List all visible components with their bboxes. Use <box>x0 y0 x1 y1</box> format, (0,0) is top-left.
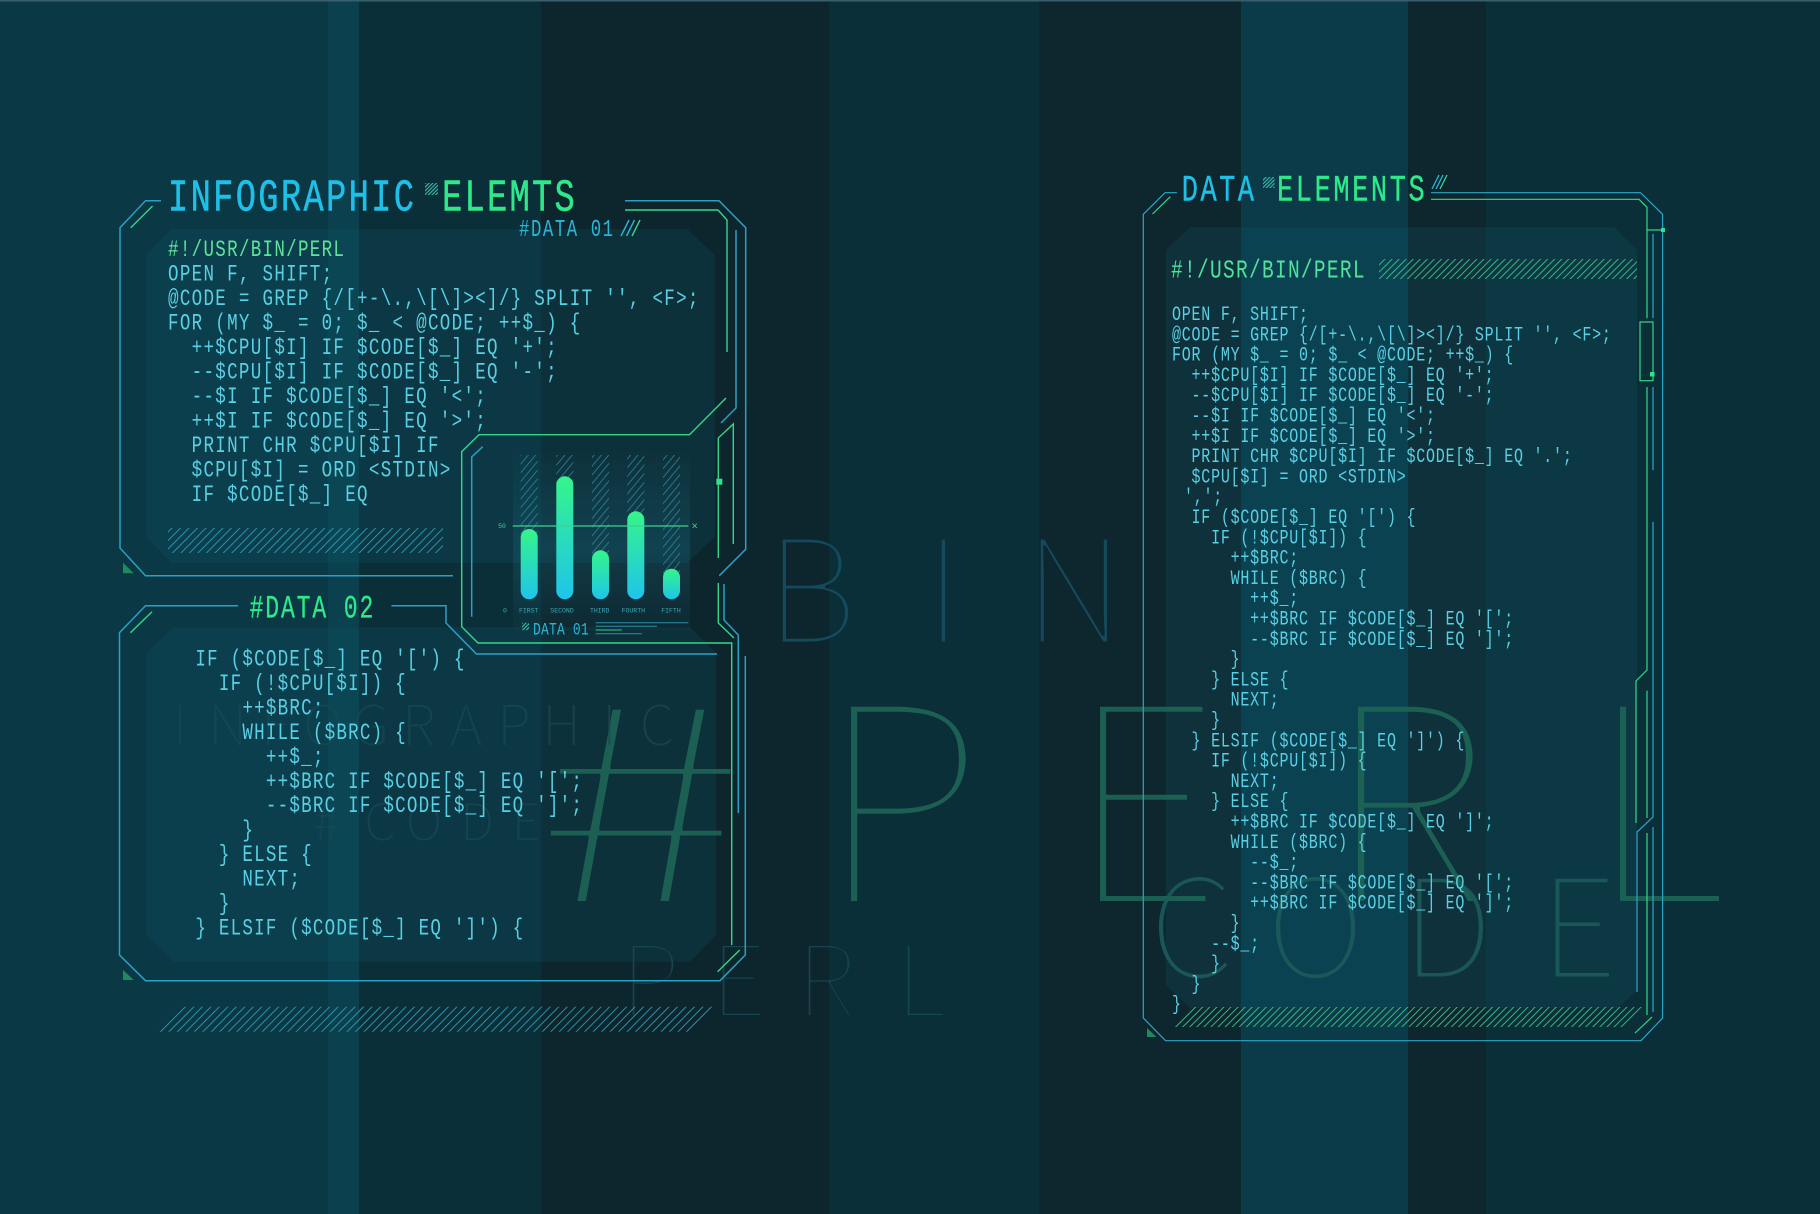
code block: data 02 panel: --$BRC IF $CODE[$_] EQ ']'; <box>195 794 583 820</box>
code block: data elements panel: } <box>1172 994 1182 1017</box>
chart caption: DATA 01: DATA 01 <box>533 620 589 640</box>
code block: infographic panel <box>168 238 700 509</box>
code block: data elements panel: ++$BRC; <box>1172 548 1299 570</box>
bars <box>521 476 680 599</box>
code block: data 02 panel: } <box>195 819 254 845</box>
code block: infographic panel: FOR (MY $_ = 0; $_ < @CODE; ++$_) { <box>168 311 582 337</box>
code block: data 02 panel: } ELSIF ($CODE[$_] EQ ']') { <box>195 916 524 942</box>
ghost word: INFOGRAPHIC: INFOGRAPHIC <box>173 681 674 761</box>
hatch strip: beside perl shebang <box>1379 259 1637 279</box>
code block: data elements panel: WHILE ($BRC) { <box>1172 568 1367 591</box>
panel: infographic elements frame <box>120 201 746 576</box>
code block: data elements panel <box>1172 304 1612 1017</box>
chart frame <box>462 398 733 945</box>
code block: data elements panel: ++$BRC IF $CODE[$_] EQ ']'; <box>1172 893 1514 915</box>
code block: data elements panel: IF (!$CPU[$I]) { <box>1172 527 1367 550</box>
code block: infographic panel: #!/USR/BIN/PERL <box>168 238 345 264</box>
code block: data elements panel: WHILE ($BRC) { <box>1172 832 1367 855</box>
hatch strip: infographic panel <box>168 528 443 553</box>
code block: infographic panel: PRINT CHR $CPU[$I] IF <box>168 434 440 460</box>
heading: #DATA 02: #DATA 02 <box>250 592 375 628</box>
code block: data elements panel: ++$BRC IF $CODE[$_] EQ ']'; <box>1172 812 1494 834</box>
code block: data elements panel: ++$_; <box>1172 588 1299 611</box>
code block: infographic panel: --$I IF $CODE[$_] EQ '<'; <box>168 385 487 411</box>
panel fill: data 02 panel <box>146 627 716 962</box>
x axis labels: FIFTH <box>661 608 681 614</box>
panel fill: data elements panel <box>1166 227 1637 1008</box>
code block: data elements panel: } ELSE { <box>1172 670 1289 692</box>
title: DATA ELEMENTS <box>1182 170 1447 212</box>
ghost symbol: hash: # <box>532 587 746 982</box>
code block: data elements panel: ++$I IF $CODE[$_] EQ '>'; <box>1172 426 1436 449</box>
code block: data elements panel: --$_; <box>1172 852 1299 875</box>
code block: data elements panel: } <box>1172 710 1221 733</box>
code block: data elements panel: NEXT; <box>1172 690 1279 712</box>
ghost word: BIN: BIN <box>766 478 1124 684</box>
x axis labels: THIRD <box>590 608 610 614</box>
x axis labels <box>503 608 681 614</box>
code block: data 02 panel: NEXT; <box>195 867 301 894</box>
code block: data 02 panel: ++$BRC; <box>195 696 325 722</box>
code block: data 02 panel: } <box>195 892 231 918</box>
x axis labels: FOURTH <box>622 608 645 614</box>
threshold line at 50: × <box>691 522 698 534</box>
code block: infographic panel: @CODE = GREP {/[+-\.,\[\]><]/} SPLIT '', <F>; <box>168 287 700 313</box>
title: DATA ELEMENTS: DATA <box>1182 170 1256 212</box>
code block: data elements panel: IF ($CODE[$_] EQ '[') { <box>1172 507 1416 530</box>
code block: infographic panel: ++$CPU[$I] IF $CODE[$_] EQ '+'; <box>168 336 558 362</box>
code block: data elements panel: } ELSE { <box>1172 791 1289 814</box>
code block: data 02 panel: ++$_; <box>195 745 325 771</box>
code block: data 02 panel: ++$BRC IF $CODE[$_] EQ '['; <box>195 770 583 796</box>
code block: data 02 panel: IF ($CODE[$_] EQ '[') { <box>195 647 466 673</box>
ghost word: CODE: CODE <box>1150 820 1616 1017</box>
code block: data elements panel: } <box>1172 954 1221 976</box>
panel: data elements frame <box>1143 193 1665 1041</box>
code block: data elements panel: ++$BRC IF $CODE[$_] EQ '['; <box>1172 609 1514 631</box>
threshold line at 50: 50 <box>498 523 506 530</box>
code block: data 02 panel: IF (!$CPU[$I]) { <box>195 672 407 698</box>
bar hatch backgrounds <box>521 455 680 575</box>
code block: data 02 panel: WHILE ($BRC) { <box>195 721 407 747</box>
chart glow <box>513 450 690 630</box>
code block: infographic panel: IF $CODE[$_] EQ <box>168 483 369 509</box>
x axis labels: 0 <box>503 608 507 614</box>
code block: data elements panel: ','; <box>1184 487 1223 509</box>
title: DATA ELEMENTS: ELEMENTS <box>1277 170 1427 212</box>
code block: infographic panel: $CPU[$I] = ORD <STDIN> <box>168 458 452 484</box>
code block: data elements panel: } <box>1172 649 1240 672</box>
code block: data elements panel: @CODE = GREP {/[+-\.,\[\]><]/} SPLIT '', <F>; <box>1172 324 1612 347</box>
chart panel <box>462 398 733 945</box>
code block: data elements panel: } ELSIF ($CODE[$_] EQ ']') { <box>1172 730 1465 753</box>
ghost word: PERL small: PERL <box>621 903 946 1045</box>
code block: data elements panel: --$I IF $CODE[$_] EQ '<'; <box>1172 406 1436 428</box>
code block: data elements panel: PRINT CHR $CPU[$I] IF $CODE[$_] EQ '.'; <box>1172 446 1573 469</box>
code block: infographic panel: ++$I IF $CODE[$_] EQ '>'; <box>168 409 487 435</box>
x axis labels: SECOND <box>550 608 574 614</box>
code block: data elements panel: } <box>1172 974 1201 997</box>
code block: data elements panel: --$BRC IF $CODE[$_] EQ ']'; <box>1172 629 1514 652</box>
threshold line at 50 <box>498 522 698 534</box>
ghost word: #CODE: #CODE <box>314 783 540 855</box>
ghost word: PERL large: PERL <box>819 586 1727 982</box>
code block: data elements panel: --$CPU[$I] IF $CODE[$_] EQ '-'; <box>1172 385 1494 408</box>
subtitle: #DATA 01: #DATA 01 <box>519 218 615 244</box>
chart caption: DATA 01 <box>522 620 688 640</box>
code block: data elements panel: } <box>1172 913 1240 936</box>
code block: infographic panel: --$CPU[$I] IF $CODE[$_] EQ '-'; <box>168 360 558 386</box>
title: INFOGRAPHIC ELEMTS: INFOGRAPHIC <box>168 173 416 224</box>
code block: data elements panel: --$_; <box>1172 933 1260 956</box>
x axis labels: FIRST <box>519 608 539 614</box>
code block: data elements panel: ++$CPU[$I] IF $CODE[$_] EQ '+'; <box>1172 365 1494 388</box>
panel fill: infographic code panel <box>146 229 715 563</box>
code block: data elements panel: $CPU[$I] = ORD <STDIN> <box>1172 467 1406 489</box>
code block: data elements panel: OPEN F, SHIFT; <box>1172 304 1309 327</box>
code block: data 02 panel: } ELSE { <box>195 843 313 869</box>
code block: data elements panel: NEXT; <box>1172 771 1279 794</box>
shebang heading: data elements panel: #!/USR/BIN/PERL <box>1171 256 1366 285</box>
title: INFOGRAPHIC ELEMTS: ELEMTS <box>442 173 577 224</box>
hatch strip: bottom of data elements panel <box>1174 1007 1642 1027</box>
hatch strip: below data 02 panel <box>153 1007 716 1032</box>
code block: data elements panel: --$BRC IF $CODE[$_] EQ '['; <box>1172 873 1514 895</box>
title: INFOGRAPHIC ELEMTS <box>168 173 577 224</box>
code block: infographic panel: OPEN F, SHIFT; <box>168 262 333 288</box>
code block: data elements panel: IF (!$CPU[$I]) { <box>1172 751 1367 773</box>
code block: data elements panel: FOR (MY $_ = 0; $_ < @CODE; ++$_) { <box>1172 345 1514 367</box>
code block: data 02 panel <box>195 647 583 942</box>
panel: data 02 frame <box>120 583 745 981</box>
